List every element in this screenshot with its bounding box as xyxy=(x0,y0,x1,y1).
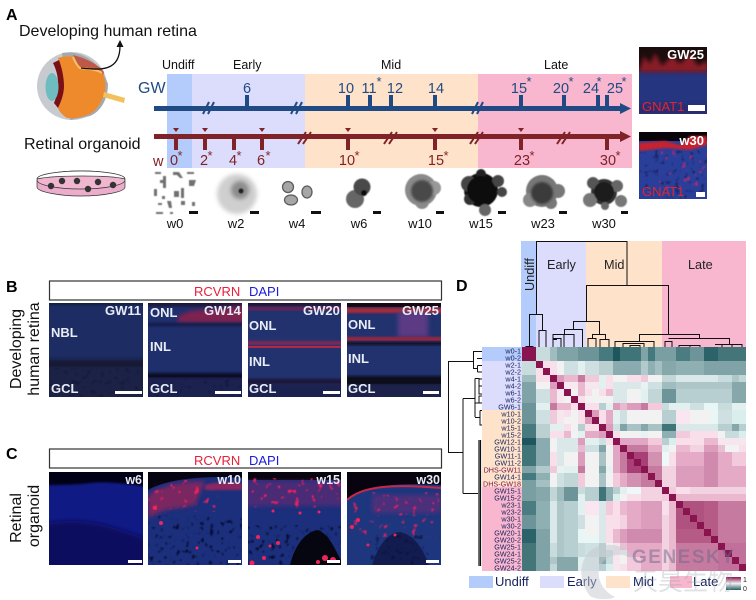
timeline: organoid weeks: * xyxy=(207,148,213,163)
row labels: DHS-GW18 xyxy=(483,480,521,488)
watermark: GENESKY xyxy=(632,547,735,568)
image: GNAT1 w30 xyxy=(639,131,707,199)
micrograph labels: w6 xyxy=(350,216,367,231)
row labels: GW6-1 xyxy=(498,402,521,412)
image: GW14 xyxy=(148,303,242,397)
image: GW20: INL xyxy=(249,354,270,369)
timeline: gestational weeks: * xyxy=(621,74,627,89)
image: w15 xyxy=(248,472,341,565)
row labels xyxy=(483,346,521,572)
header: RCVRN DAPI panel B: RCVRN xyxy=(194,284,240,299)
row labels: GW12-1 xyxy=(494,438,521,446)
rotated label: developing human retina xyxy=(8,302,43,396)
timeline: gestational weeks: * xyxy=(568,74,574,89)
rotated label: developing human retina: human retina xyxy=(26,302,43,396)
row labels: w2-2 xyxy=(504,368,521,376)
arrow: eye to developing retina xyxy=(81,40,124,69)
micrograph labels: w10 xyxy=(407,216,432,231)
row labels: GW10-1 xyxy=(494,444,521,454)
timeline: gestational weeks: 6 xyxy=(243,81,251,97)
timeline: organoid weeks: 2 xyxy=(200,153,208,169)
micrograph labels: w2 xyxy=(227,216,244,231)
timeline: gestational weeks: 15 xyxy=(511,81,527,97)
micrograph w23 xyxy=(523,175,565,209)
row labels: w2-1 xyxy=(504,360,521,370)
timeline: gestational weeks: * xyxy=(376,74,382,89)
image: GW25: GCL xyxy=(348,381,376,396)
image: GW25: GW25 xyxy=(402,303,439,318)
row labels: GW24-2 xyxy=(494,564,521,572)
row labels: w15-1 xyxy=(500,424,521,432)
micrograph labels: w4 xyxy=(288,216,305,231)
row labels: w4-2 xyxy=(504,382,521,390)
rotated label: retinal organoid xyxy=(8,485,43,547)
organoid micrographs xyxy=(154,169,628,231)
top stage bands xyxy=(521,241,746,347)
top stage labels: Early xyxy=(547,258,577,272)
row labels: GW20-1 xyxy=(494,528,521,538)
legend: Undiff xyxy=(495,574,529,589)
image: GW14: INL xyxy=(150,339,171,354)
icon: eye anatomy xyxy=(37,52,125,120)
image: GW11: GW11 xyxy=(105,303,141,318)
timeline: organoid weeks: * xyxy=(529,148,535,163)
panel A label: A xyxy=(6,7,18,24)
image: GNAT1 w30: GNAT1 xyxy=(642,184,684,199)
timeline: gestational weeks: GW xyxy=(138,80,166,97)
stage labels: Mid xyxy=(381,58,401,72)
rotated label: developing human retina: Developing xyxy=(8,309,25,389)
timeline: gestational weeks: * xyxy=(526,74,532,89)
timeline: organoid weeks: * xyxy=(615,148,621,163)
image: w6: w6 xyxy=(124,473,142,487)
image: GW11 xyxy=(49,303,143,397)
row labels: w6-1 xyxy=(504,388,521,398)
row labels: w0-2 xyxy=(504,354,521,362)
image: w15: w15 xyxy=(315,473,340,487)
legend: Mid xyxy=(633,574,654,589)
image: GW20 xyxy=(248,303,341,397)
row labels: w0-1 xyxy=(504,346,521,356)
panel D label: D xyxy=(456,278,468,295)
image: GNAT1 GW25 xyxy=(639,47,707,114)
row labels: w30-1 xyxy=(500,514,521,524)
timeline: organoid weeks: 4 xyxy=(229,153,237,169)
stage labels xyxy=(162,58,568,72)
timeline: organoid weeks: 23 xyxy=(514,153,530,169)
rotated label: retinal organoid: organoid xyxy=(26,485,43,547)
timeline: gestational weeks: * xyxy=(596,74,602,89)
image: GW14: ONL xyxy=(150,305,178,320)
row labels: GW15-1 xyxy=(494,486,521,496)
image: GW20: GW20 xyxy=(303,303,340,318)
image: w10: w10 xyxy=(216,473,241,487)
legend: Early xyxy=(567,574,597,589)
header: RCVRN DAPI panel B xyxy=(50,281,442,300)
timeline: gestational weeks: 24 xyxy=(583,81,599,97)
legend: 0 xyxy=(743,586,747,593)
header: RCVRN DAPI panel B: DAPI xyxy=(249,284,279,299)
row labels: w30-2 xyxy=(500,522,521,530)
correlation heatmap xyxy=(522,347,746,571)
watermark xyxy=(581,545,735,599)
top dendrogram xyxy=(526,242,742,347)
image: GW11: GCL xyxy=(51,381,78,396)
timeline: organoid weeks: * xyxy=(265,148,271,163)
panel B label: B xyxy=(6,279,18,296)
timeline: gestational weeks: 12 xyxy=(387,81,403,97)
image: GNAT1 GW25: GNAT1 xyxy=(642,99,684,114)
timeline: organoid weeks: * xyxy=(354,148,360,163)
micrograph w15 xyxy=(461,169,507,216)
image: GW14: GW14 xyxy=(204,303,242,318)
timeline: gestational weeks: 20 xyxy=(553,81,569,97)
legend: 1 xyxy=(743,577,747,584)
row labels: GW15-2 xyxy=(494,494,521,502)
timeline: gestational weeks: 11 xyxy=(361,81,377,97)
micrograph w10 xyxy=(405,174,441,209)
row labels: w23-1 xyxy=(500,500,521,510)
timeline: organoid weeks: 15 xyxy=(428,153,444,169)
row labels: GW11-1 xyxy=(495,452,521,460)
row labels: w10-1 xyxy=(500,410,521,418)
micrograph labels xyxy=(166,216,616,231)
timeline: organoid weeks: w xyxy=(152,154,164,170)
row labels: GW20-2 xyxy=(494,536,521,544)
timeline: gestational weeks: 25 xyxy=(607,81,623,97)
top stage labels xyxy=(523,258,713,291)
top stage labels: Undiff xyxy=(523,258,537,291)
header: RCVRN DAPI panel C: DAPI xyxy=(249,453,279,468)
micrograph labels: w0 xyxy=(166,216,183,231)
micrograph labels: w30 xyxy=(591,216,616,231)
micrograph w30 xyxy=(583,177,627,210)
top stage labels: Late xyxy=(688,258,713,272)
left stage label background xyxy=(482,347,522,571)
micrograph w0 xyxy=(154,172,196,214)
timeline: organoid weeks: 6 xyxy=(257,153,265,169)
timeline: organoid weeks: * xyxy=(443,148,449,163)
top stage labels: Mid xyxy=(604,258,624,272)
row labels: GW25-2 xyxy=(494,556,521,566)
row labels: GW11-2 xyxy=(495,458,521,468)
row labels: GW14-1 xyxy=(494,472,521,482)
heading: developing human retina: Developing human retina xyxy=(19,23,197,40)
scale bars xyxy=(189,211,628,214)
row labels: w6-2 xyxy=(504,396,521,404)
heatmap diagonal xyxy=(522,347,746,571)
image: w30: w30 xyxy=(415,473,440,487)
heading: retinal organoid: Retinal organoid xyxy=(24,136,141,153)
row labels: DHS-GW11 xyxy=(484,466,521,474)
image: w6 xyxy=(49,472,143,565)
row labels: w23-2 xyxy=(500,508,521,516)
image: GW25 xyxy=(347,303,441,397)
timeline: gestational weeks: 14 xyxy=(428,81,444,97)
watermark: 天昊生物 xyxy=(633,568,733,596)
timeline: organoid weeks xyxy=(152,128,631,170)
image: GW11: NBL xyxy=(51,325,78,340)
timeline: organoid weeks: 0 xyxy=(170,153,178,169)
panel C label: C xyxy=(6,446,18,463)
row labels: GW25-1 xyxy=(494,542,521,552)
image: GW14: GCL xyxy=(150,381,178,396)
left dendrogram xyxy=(448,352,482,494)
timeline: organoid weeks: 30 xyxy=(600,153,616,169)
timeline: gestational weeks: 10 xyxy=(338,81,354,97)
micrograph w6 xyxy=(346,178,370,208)
image: GW20: ONL xyxy=(249,318,276,333)
image: w10 xyxy=(148,472,242,565)
legend xyxy=(469,574,747,593)
image: GW25: INL xyxy=(348,351,369,366)
image: w30 xyxy=(347,472,441,575)
rotated label: retinal organoid: Retinal xyxy=(8,493,25,543)
row labels: w4-1 xyxy=(504,374,521,384)
timeline stage bands xyxy=(167,74,632,168)
image: GW20: GCL xyxy=(249,381,276,396)
header: RCVRN DAPI panel C xyxy=(50,449,442,468)
stage labels: Undiff xyxy=(162,58,195,72)
image: GNAT1 w30: w30 xyxy=(678,133,704,148)
micrograph w4 xyxy=(282,182,312,205)
timeline: gestational weeks xyxy=(138,74,631,114)
image: GNAT1 GW25: GW25 xyxy=(667,47,704,62)
timeline: organoid weeks: * xyxy=(177,148,183,163)
row labels: w10-2 xyxy=(500,416,521,426)
micrograph labels: w23 xyxy=(530,216,555,231)
stage labels: Late xyxy=(544,58,568,72)
image: GW25: ONL xyxy=(348,317,376,332)
icon: culture dish xyxy=(37,171,125,196)
header: RCVRN DAPI panel C: RCVRN xyxy=(194,453,240,468)
row labels: w15-2 xyxy=(500,430,521,440)
stage labels: Early xyxy=(233,58,262,72)
legend: Late xyxy=(693,574,718,589)
micrograph labels: w15 xyxy=(468,216,493,231)
timeline: organoid weeks: * xyxy=(236,148,242,163)
micrograph w2 xyxy=(217,174,257,214)
timeline: organoid weeks: 10 xyxy=(339,153,355,169)
row labels: GW24-1 xyxy=(494,550,521,558)
